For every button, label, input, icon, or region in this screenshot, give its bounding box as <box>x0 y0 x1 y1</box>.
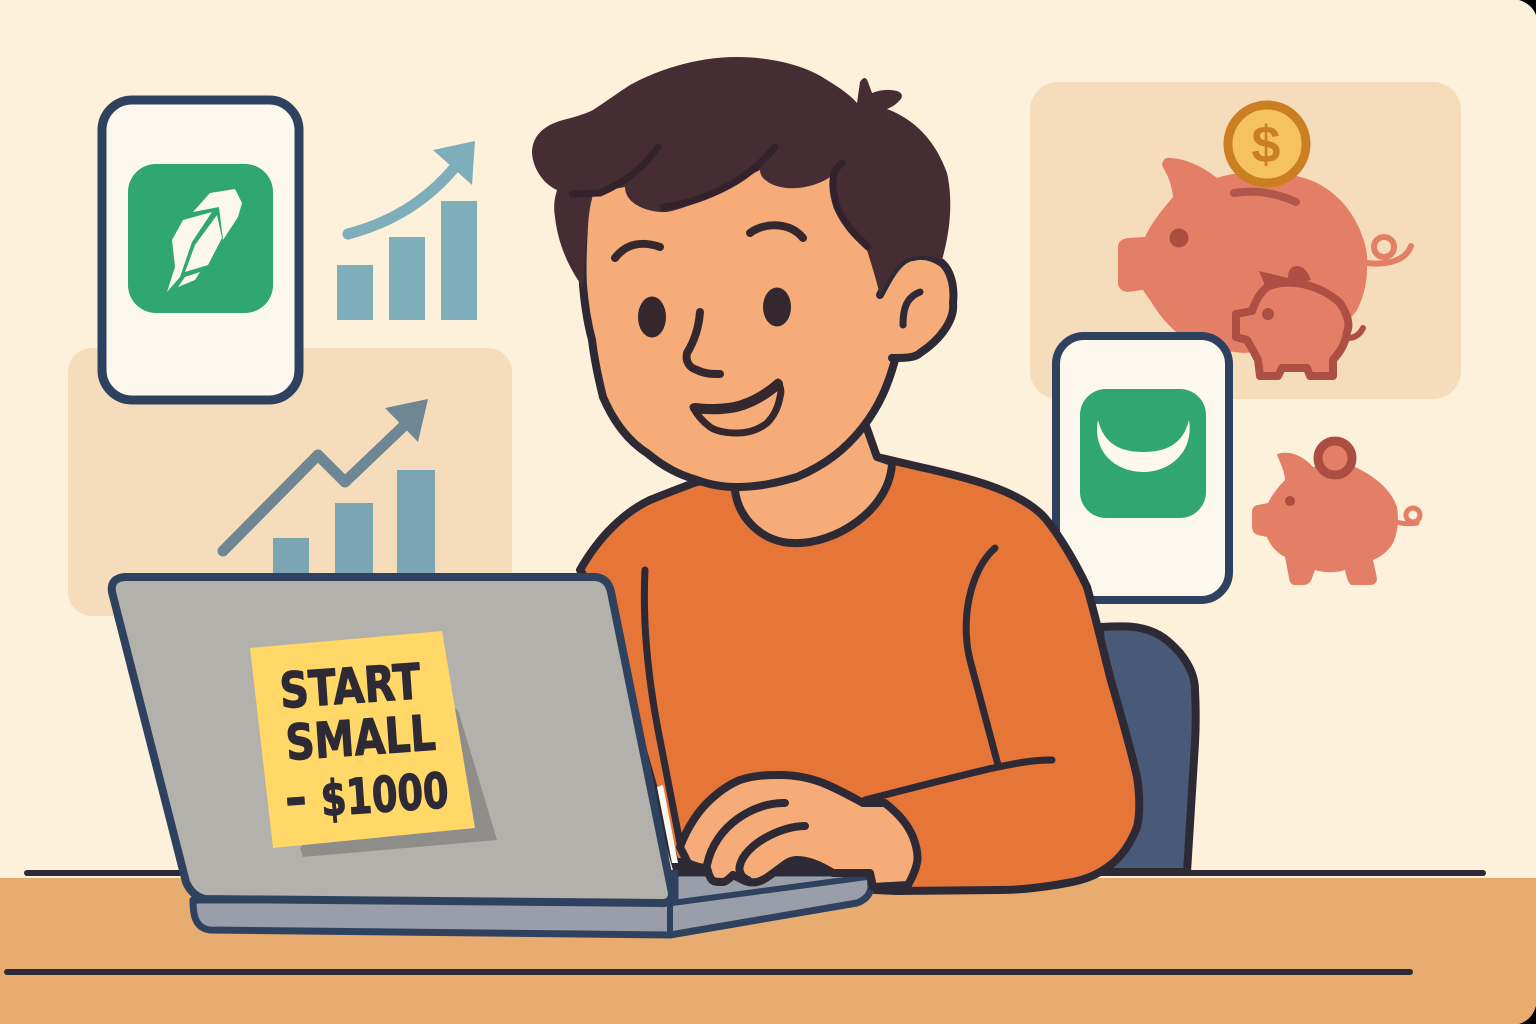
table <box>0 878 1536 1024</box>
coin dollar sign: $ <box>1252 116 1281 174</box>
sticky note text: START <box>278 653 423 720</box>
chair <box>1100 626 1196 872</box>
icon: third piggy bank with ring <box>1252 441 1420 585</box>
laptop base front seam <box>670 877 867 935</box>
sleeve lines <box>644 548 1052 843</box>
panel: right tan backdrop <box>1030 82 1461 399</box>
neck and collar lines <box>735 423 892 543</box>
white screen side strip <box>657 785 678 863</box>
fingers <box>707 803 805 880</box>
phone: green crescent app <box>1056 336 1229 600</box>
hand <box>680 775 918 887</box>
shirt <box>580 457 1139 891</box>
laptop base <box>193 873 871 935</box>
table front edge line <box>7 969 1410 975</box>
eyebrows <box>615 225 803 258</box>
image corners <box>1519 0 1536 1024</box>
person <box>532 57 1139 891</box>
ear inner line <box>903 292 920 325</box>
laptop screen <box>112 577 672 903</box>
chart: blue bars with rising curved arrow <box>337 141 477 320</box>
sticky note text <box>278 653 451 828</box>
icon: large piggy bank with coin <box>1118 105 1411 353</box>
phone: green feather app <box>102 100 299 400</box>
sticky note shadow <box>300 700 497 857</box>
ear outline <box>880 256 953 358</box>
neck <box>735 423 892 543</box>
hair strands <box>572 147 868 247</box>
icon: small outlined piggy bank <box>1236 266 1363 376</box>
chart: bars with zigzag arrow <box>223 399 435 578</box>
nose <box>687 312 720 374</box>
ear <box>880 256 953 358</box>
panel: left tan backdrop <box>68 348 512 616</box>
left eye <box>638 296 666 338</box>
face <box>583 150 895 487</box>
table back edge line <box>27 870 1483 876</box>
sticky note text: SMALL <box>284 705 437 772</box>
sticky note text: - <box>283 770 309 828</box>
hair <box>532 57 950 295</box>
mouth <box>693 382 781 433</box>
sticky note text: $1000 <box>319 762 451 828</box>
right eye <box>763 288 791 326</box>
laptop <box>112 577 871 935</box>
shadow under hand <box>678 858 838 876</box>
sticky note <box>250 631 475 848</box>
